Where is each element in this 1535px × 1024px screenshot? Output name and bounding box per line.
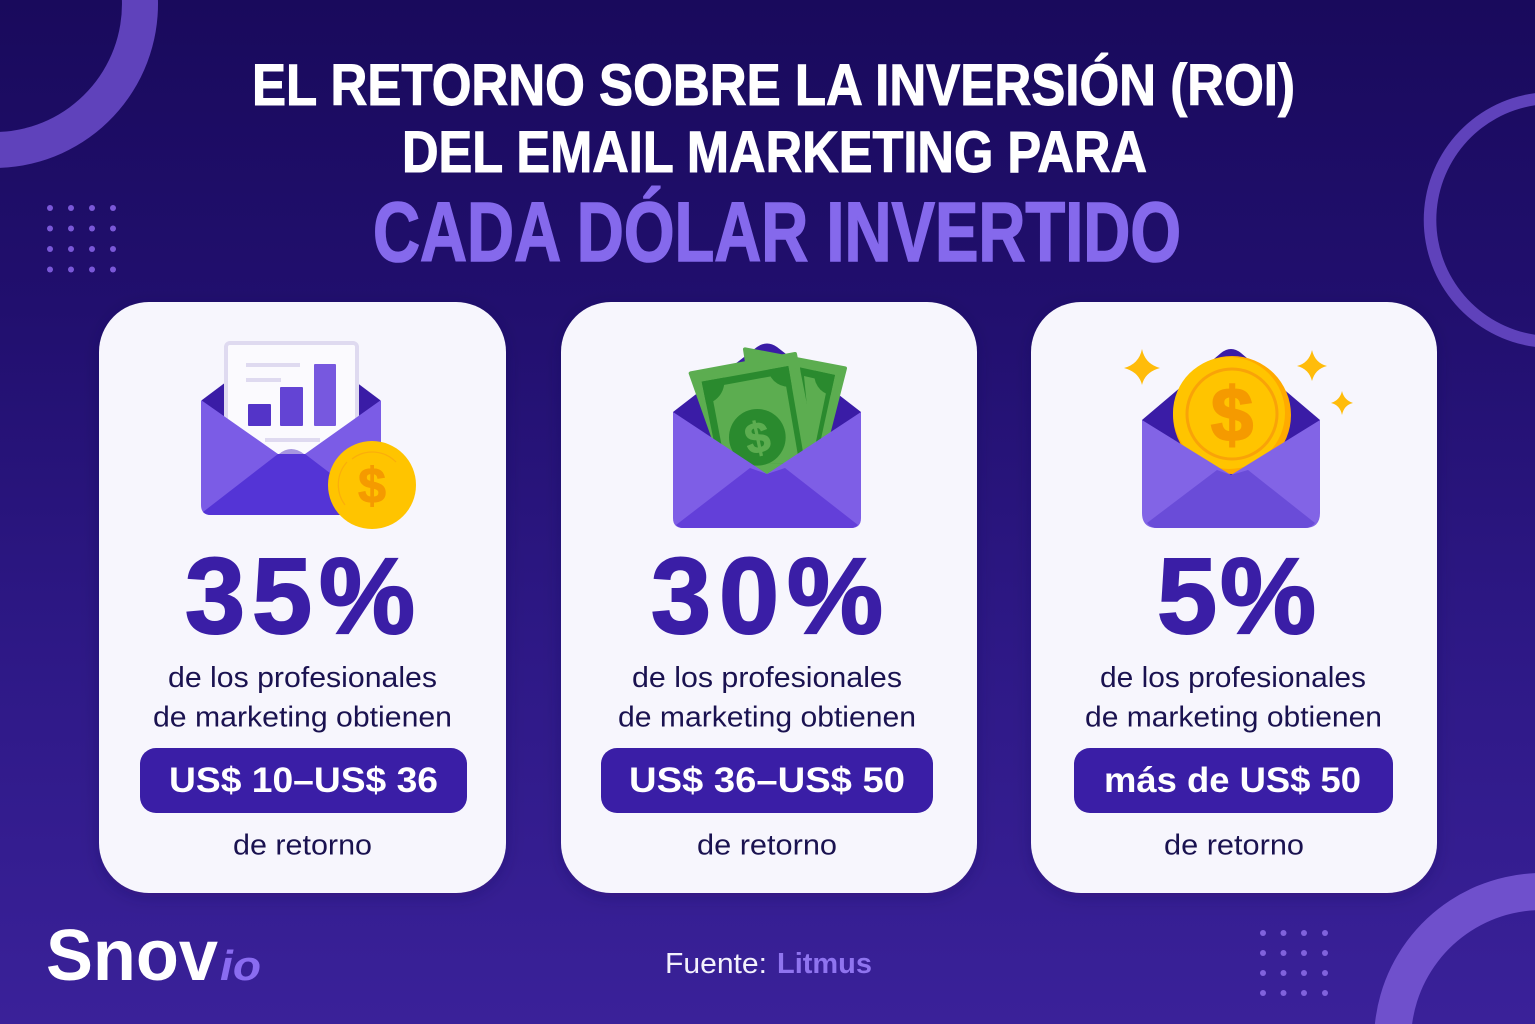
icon: banknotes: $ (741, 413, 774, 465)
caption: de retorno (1164, 830, 1304, 862)
icon: sparkles (1124, 349, 1353, 415)
dot grid: top left (47, 205, 116, 272)
description (1085, 662, 1382, 734)
icon: envelope with chart and coin (201, 343, 416, 529)
title: DEL EMAIL MARKETING PARA (402, 120, 1147, 185)
icon: envelope with coin and sparkles (1124, 349, 1353, 528)
return range pill: US$ 36–US$ 50 (629, 761, 905, 800)
description (153, 662, 452, 734)
source: Litmus (777, 948, 872, 980)
caption: de retorno (233, 830, 372, 862)
description: de los profesionales (632, 662, 902, 694)
return range pill (140, 748, 467, 813)
dot grid: bottom right (1260, 930, 1328, 996)
icon: gold coin (328, 441, 416, 529)
panel: card 35% (99, 302, 506, 893)
description: de los profesionales (1100, 662, 1366, 694)
return range pill (601, 748, 933, 813)
icon: envelope with coin and sparkles: $ (1211, 373, 1253, 458)
return range pill (1074, 748, 1393, 813)
description: de los profesionales (168, 662, 437, 694)
source (665, 948, 872, 980)
icon: envelope with banknotes (673, 344, 861, 528)
caption: de retorno (697, 830, 837, 862)
title: EL RETORNO SOBRE LA INVERSIÓN (ROI) (252, 53, 1295, 118)
panel: card 30% (561, 302, 977, 893)
decorative ring: right (1424, 93, 1535, 347)
title: CADA DÓLAR INVERTIDO (373, 185, 1181, 279)
percentage: 30% (651, 535, 883, 656)
logo: Snov.io: io (220, 942, 261, 989)
icon: banknotes (688, 347, 847, 474)
description: de marketing obtienen (1085, 702, 1382, 734)
decorative ring: bottom right (1375, 873, 1535, 1024)
logo: Snov.io: Snov (46, 916, 218, 996)
title (252, 53, 1295, 279)
return range pill: US$ 10–US$ 36 (169, 761, 438, 800)
icon: gold coin: $ (358, 458, 386, 514)
percentage: 35% (185, 535, 415, 656)
description: de marketing obtienen (618, 702, 916, 734)
source: Fuente: (665, 948, 767, 980)
description (618, 662, 916, 734)
description: de marketing obtienen (153, 702, 452, 734)
decorative ring: top left (0, 0, 158, 168)
return range pill: más de US$ 50 (1104, 761, 1361, 800)
panel: card 5% (1031, 302, 1437, 893)
percentage: 5% (1157, 535, 1316, 656)
